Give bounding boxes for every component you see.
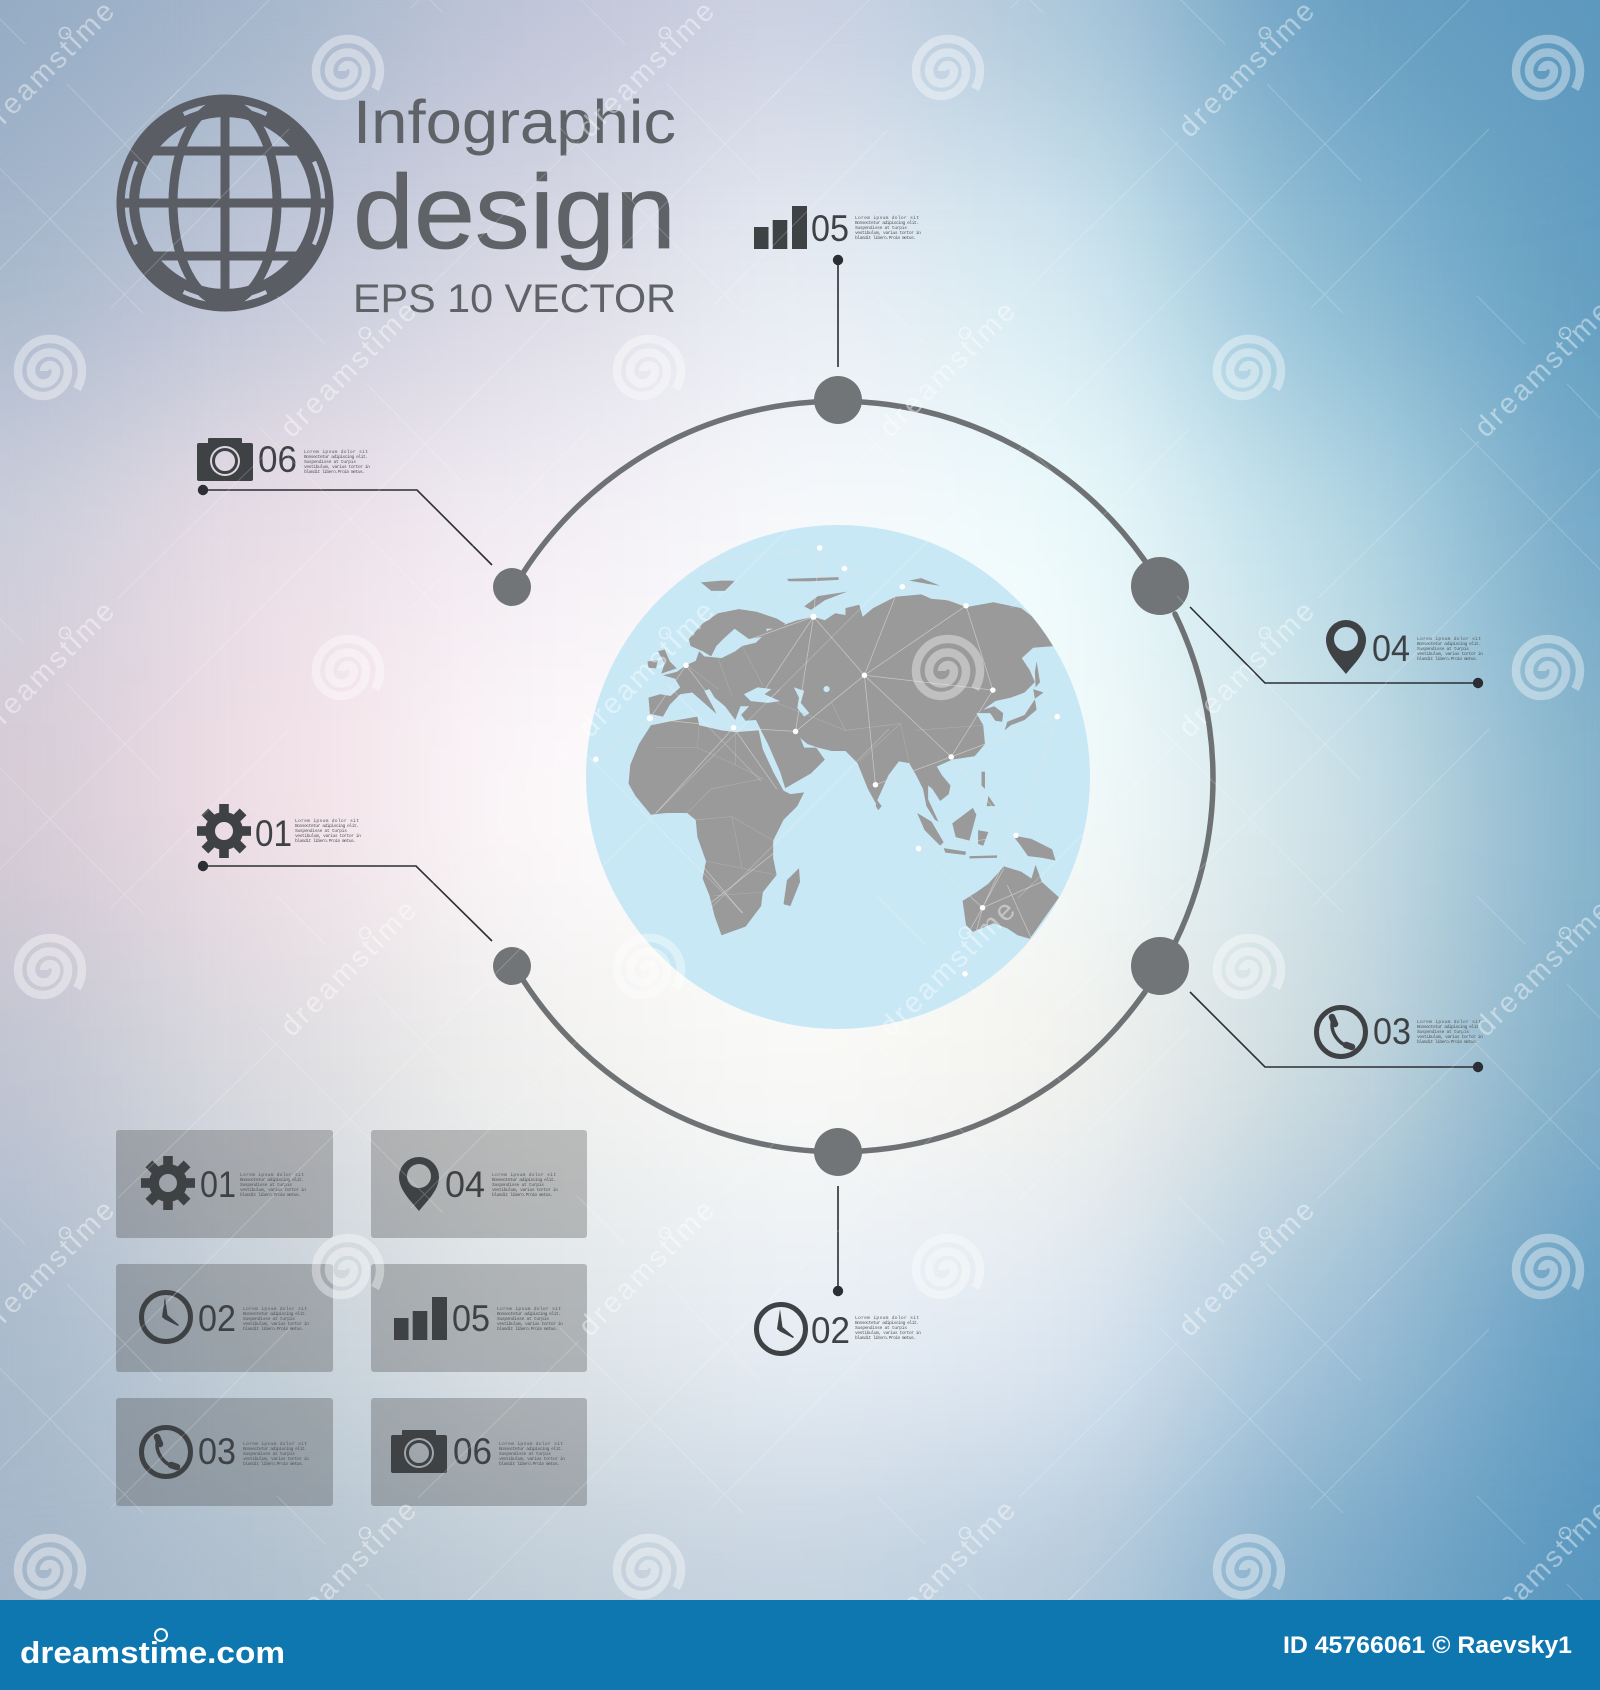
callout 05: 05 [811, 208, 849, 249]
card 05: Bonsectetur adipiscing elit. [497, 1311, 561, 1317]
callout 02: Lorem ipsum dolor sit [855, 1315, 919, 1321]
watermark overlay: dreamstime [572, 595, 721, 744]
map of Eurasia, Africa and Australia [593, 545, 1060, 977]
callout 01: blandit libero.Proin metus. [295, 838, 356, 844]
footer logo: dreamstime.com [20, 1635, 285, 1670]
card 05: vestibulum, varius tortor in [497, 1321, 563, 1327]
card 01: Lorem ipsum dolor sit [240, 1172, 304, 1178]
card 01: vestibulum, varius tortor in [240, 1187, 306, 1193]
card 01: blandit libero.Proin metus. [240, 1192, 301, 1198]
callout 02: blandit libero.Proin metus. [855, 1335, 916, 1341]
card 04: blandit libero.Proin metus. [492, 1192, 553, 1198]
card 05: Lorem ipsum dolor sit [497, 1306, 561, 1312]
card 04: Lorem ipsum dolor sit [492, 1172, 556, 1178]
watermark overlay: dreamstime [274, 894, 423, 1043]
callout 02 [756, 1186, 921, 1354]
callout 03: Lorem ipsum dolor sit [1417, 1019, 1481, 1025]
ring nodes [493, 376, 1189, 1176]
callout 06: blandit libero.Proin metus. [304, 469, 365, 475]
callout 06: Bonsectetur adipiscing elit. [304, 454, 368, 460]
callout 04 [1190, 607, 1483, 688]
callout 03: 03 [1373, 1011, 1411, 1052]
card 06: Lorem ipsum dolor sit [499, 1441, 563, 1447]
callout 06: Suspendisse at turpis [304, 459, 356, 465]
card 06: vestibulum, varius tortor in [499, 1456, 565, 1462]
card 04 [371, 1130, 587, 1238]
card 03: 03 [198, 1431, 236, 1472]
callout 03: Suspendisse at turpis [1417, 1029, 1469, 1035]
watermark overlay: dreamstime [1172, 595, 1321, 744]
card 02: Suspendisse at turpis [243, 1316, 295, 1322]
callout 03: blandit libero.Proin metus. [1417, 1039, 1478, 1045]
footer credit: ID 45766061 © Raevsky1 [1283, 1632, 1572, 1659]
callout 01: vestibulum, varius tortor in [295, 833, 361, 839]
watermark overlay: dreamstime [873, 894, 1022, 1043]
card 02: Bonsectetur adipiscing elit. [243, 1311, 307, 1317]
callout 03 [1190, 992, 1483, 1072]
callout 06: 06 [258, 439, 297, 480]
title: design [353, 154, 676, 271]
card 04: 04 [445, 1164, 485, 1205]
callout 03: vestibulum, varius tortor in [1417, 1034, 1483, 1040]
callout 06: vestibulum, varius tortor in [304, 464, 370, 470]
callout 05: Bonsectetur adipiscing elit. [855, 220, 919, 226]
callout 05: vestibulum, varius tortor in [855, 230, 921, 236]
title: Infographic [353, 88, 676, 156]
card 02: Lorem ipsum dolor sit [243, 1306, 307, 1312]
world globe with map [586, 525, 1090, 1029]
callout 02: Bonsectetur adipiscing elit. [855, 1320, 919, 1326]
footer band [0, 1600, 1600, 1690]
card 01: Bonsectetur adipiscing elit. [240, 1177, 304, 1183]
card 03: Lorem ipsum dolor sit [243, 1441, 307, 1447]
callout 02: Suspendisse at turpis [855, 1325, 907, 1331]
watermark overlay: dreamstime [274, 295, 423, 444]
icon: wireframe globe logo [116, 95, 334, 311]
card 02 [116, 1264, 333, 1372]
callout 01: Suspendisse at turpis [295, 828, 347, 834]
card 06: blandit libero.Proin metus. [499, 1461, 560, 1467]
callout 05: Suspendisse at turpis [855, 225, 907, 231]
callout 05: blandit libero.Proin metus. [855, 235, 916, 241]
card 05: Suspendisse at turpis [497, 1316, 549, 1322]
callout 04: Lorem ipsum dolor sit [1417, 636, 1481, 642]
callout 05 [754, 206, 921, 367]
callout 05: Lorem ipsum dolor sit [855, 215, 919, 221]
callout 02: vestibulum, varius tortor in [855, 1330, 921, 1336]
callout 06 [197, 438, 492, 565]
card 02: blandit libero.Proin metus. [243, 1326, 304, 1332]
card 06: Bonsectetur adipiscing elit. [499, 1446, 563, 1452]
ring segments [523, 402, 1213, 1151]
callout 02: 02 [811, 1310, 850, 1351]
callout 04: Suspendisse at turpis [1417, 646, 1469, 652]
title: EPS 10 VECTOR [353, 277, 676, 321]
card 03: blandit libero.Proin metus. [243, 1461, 304, 1467]
card 04: Bonsectetur adipiscing elit. [492, 1177, 556, 1183]
callout 06: Lorem ipsum dolor sit [304, 449, 368, 455]
watermark overlay: dreamstime [873, 295, 1022, 444]
card 01: Suspendisse at turpis [240, 1182, 292, 1188]
card 01 [116, 1130, 333, 1238]
card 03: Suspendisse at turpis [243, 1451, 295, 1457]
callout 04: Bonsectetur adipiscing elit. [1417, 641, 1481, 647]
callout 03: Bonsectetur adipiscing elit. [1417, 1024, 1481, 1030]
card 02: 02 [198, 1298, 236, 1339]
card 04: vestibulum, varius tortor in [492, 1187, 558, 1193]
callout 01 [197, 804, 492, 941]
watermark overlay: dreamstime [572, 1194, 721, 1343]
card 01: 01 [200, 1164, 236, 1205]
title [353, 88, 676, 321]
card 03: vestibulum, varius tortor in [243, 1456, 309, 1462]
card 05 [371, 1264, 587, 1372]
callout 04: blandit libero.Proin metus. [1417, 656, 1478, 662]
card 03 [116, 1398, 333, 1506]
card 06 [371, 1398, 587, 1506]
callout 01: Bonsectetur adipiscing elit. [295, 823, 359, 829]
callout 01: Lorem ipsum dolor sit [295, 818, 359, 824]
card 06: 06 [453, 1431, 492, 1472]
watermark overlay: dreamstime [274, 1494, 423, 1643]
card 02: vestibulum, varius tortor in [243, 1321, 309, 1327]
card 03: Bonsectetur adipiscing elit. [243, 1446, 307, 1452]
card 04: Suspendisse at turpis [492, 1182, 544, 1188]
callout 04: 04 [1372, 628, 1410, 669]
card 05: 05 [452, 1298, 490, 1339]
watermark overlay: dreamstime [1172, 1194, 1321, 1343]
callout 01: 01 [255, 813, 292, 854]
card 05: blandit libero.Proin metus. [497, 1326, 558, 1332]
card 06: Suspendisse at turpis [499, 1451, 551, 1457]
watermark overlay: dreamstime [873, 1494, 1022, 1643]
callout 04: vestibulum, varius tortor in [1417, 651, 1483, 657]
